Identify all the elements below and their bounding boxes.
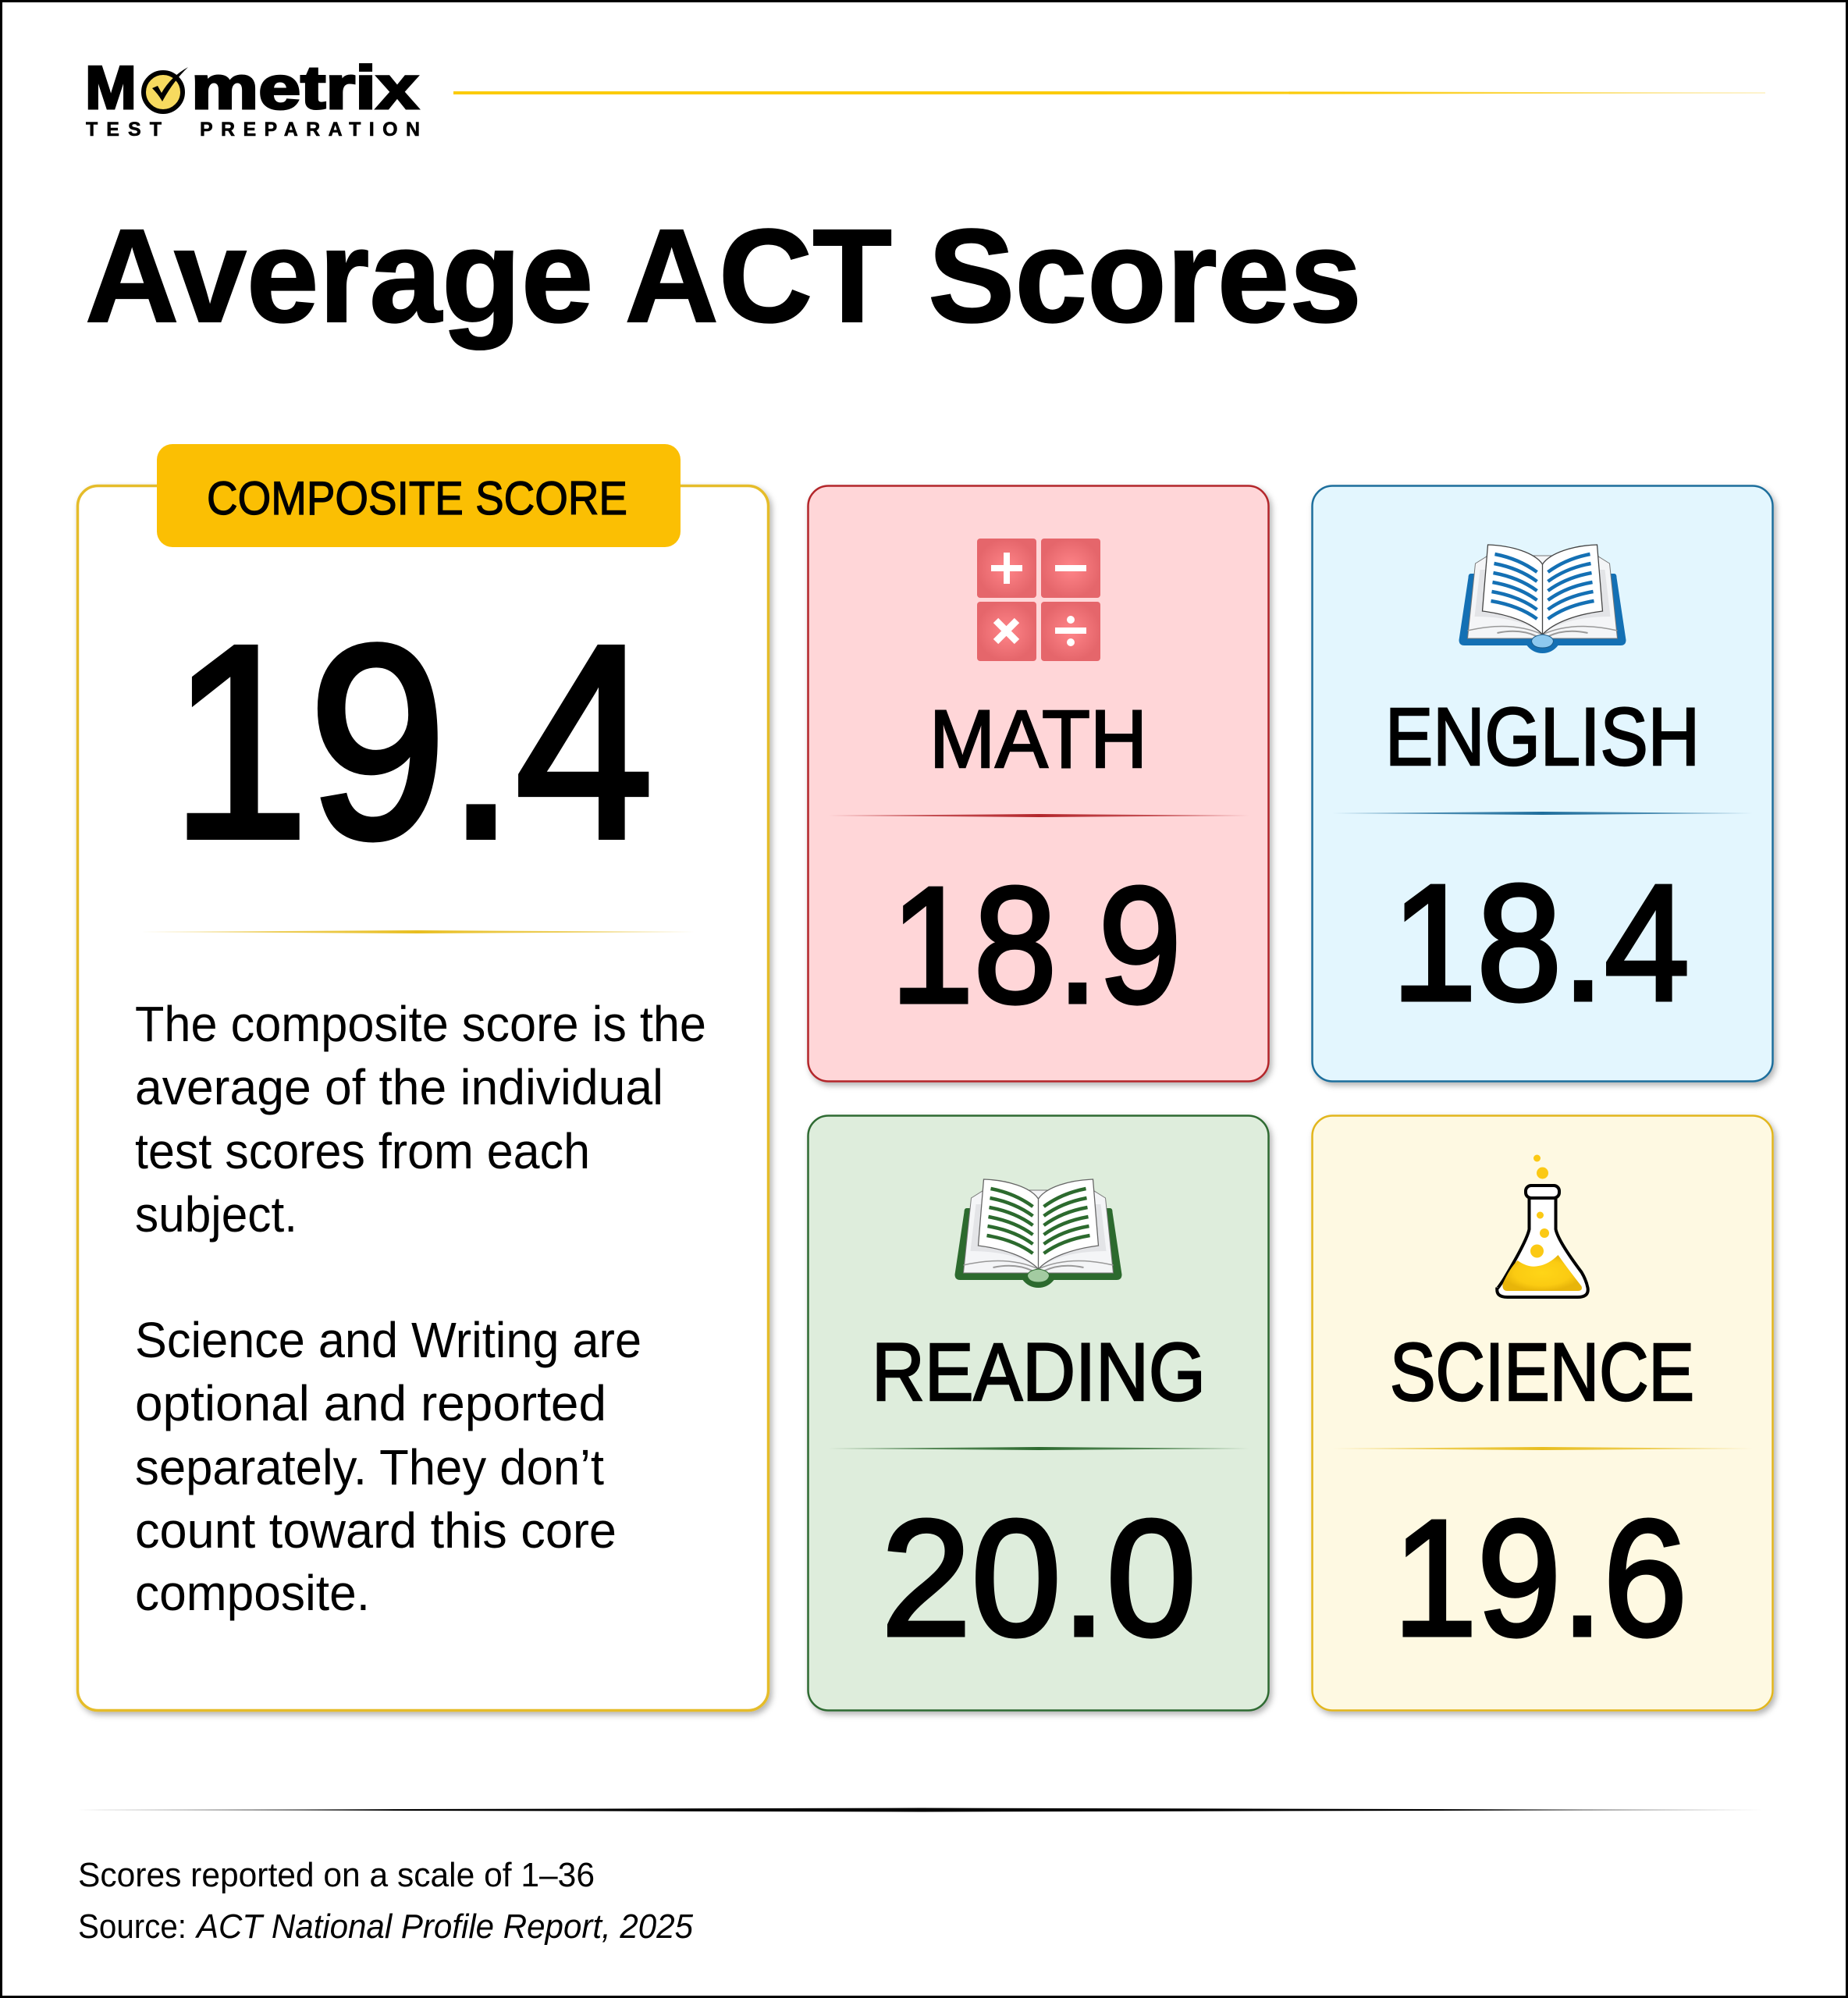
panel: science <box>1313 1116 1773 1711</box>
science value: 19.6 <box>1393 1485 1687 1670</box>
composite divider <box>140 930 695 933</box>
composite explanation text: separately. They don’t <box>135 1439 604 1495</box>
footer notes <box>78 1856 693 1946</box>
math label: MATH <box>929 694 1147 785</box>
footer rule <box>76 1808 1765 1812</box>
icon: blue book <box>1459 545 1626 653</box>
composite badge: COMPOSITE SCORE <box>207 472 627 524</box>
composite explanation text: subject. <box>135 1186 297 1243</box>
logo: Mometrix Test Preparation: metrix <box>191 53 418 122</box>
footer notes: Scores reported on a scale of 1–36 <box>78 1856 595 1894</box>
composite explanation text: The composite score is the <box>135 996 706 1052</box>
reading divider <box>828 1447 1249 1450</box>
composite value: 19.4 <box>171 588 653 895</box>
composite explanation text: count toward this core <box>135 1502 617 1559</box>
composite card background <box>78 485 768 1711</box>
composite explanation text: test scores from each <box>135 1123 590 1179</box>
title: Average ACT Scores <box>85 202 1362 350</box>
math value: 18.9 <box>890 852 1182 1037</box>
panel: reading <box>808 1116 1269 1711</box>
reading label: READING <box>872 1327 1206 1418</box>
english card background <box>1313 485 1773 1082</box>
science card background <box>1313 1116 1773 1711</box>
reading value: 20.0 <box>881 1485 1196 1670</box>
composite explanation text: optional and reported <box>135 1375 606 1431</box>
math card background <box>808 485 1269 1082</box>
composite explanation text <box>135 996 706 1621</box>
english label: ENGLISH <box>1385 691 1700 783</box>
icon: logo check mark circle <box>144 67 188 112</box>
footer notes: Source: <box>78 1907 187 1946</box>
english divider <box>1332 812 1753 815</box>
logo: Mometrix Test Preparation: PREPARATION <box>200 119 420 140</box>
icon: math operators <box>977 539 1100 661</box>
logo: Mometrix Test Preparation: TEST <box>86 119 162 140</box>
icon: green book <box>955 1179 1122 1288</box>
composite explanation text: Science and Writing are <box>135 1312 641 1368</box>
panel: composite score <box>78 444 768 1711</box>
composite explanation text: average of the individual <box>135 1059 663 1115</box>
panel: math <box>808 485 1269 1082</box>
logo: Mometrix Test Preparation <box>85 53 420 140</box>
science label: SCIENCE <box>1390 1327 1694 1418</box>
science divider <box>1332 1447 1753 1450</box>
reading card background <box>808 1116 1269 1711</box>
panel: english <box>1313 485 1773 1082</box>
icon: flask <box>1497 1155 1588 1297</box>
footer notes: ACT National Profile Report, 2025 <box>194 1907 693 1946</box>
english value: 18.4 <box>1391 850 1690 1035</box>
header gold rule <box>453 91 1765 94</box>
composite badge <box>157 444 681 547</box>
logo: Mometrix Test Preparation: M <box>85 53 137 122</box>
math divider <box>828 814 1249 817</box>
composite explanation text: composite. <box>135 1565 370 1621</box>
